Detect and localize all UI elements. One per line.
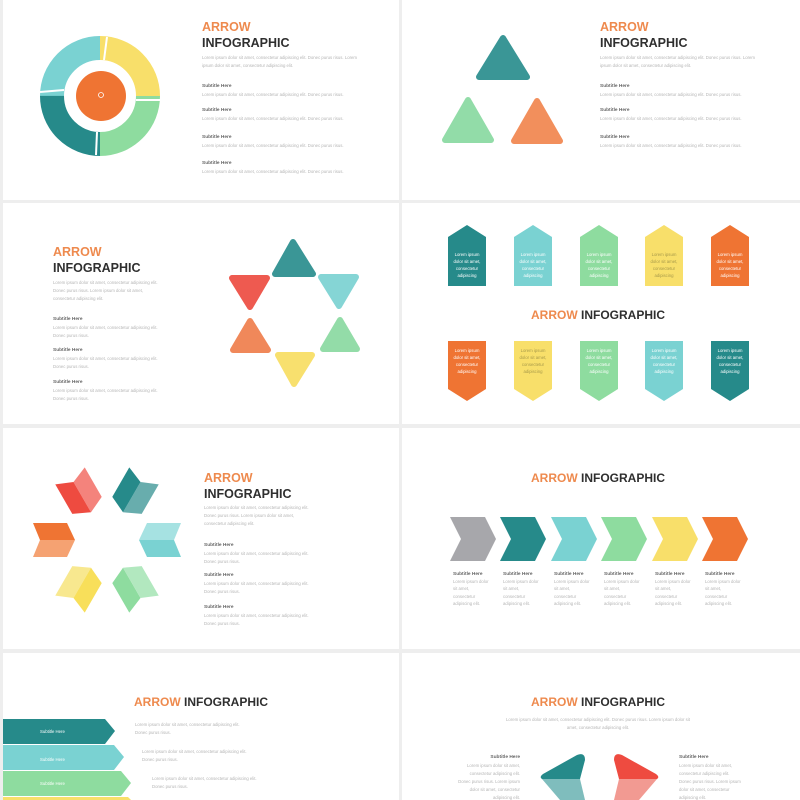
step captions: consectetur [655,594,678,599]
text block: ARROW [204,471,253,485]
step captions: Lorem ipsum dolor [503,579,539,584]
text block: Lorem ipsum dolor sit amet, consectetur adipiscing elit. Donec purus risus. [600,143,742,148]
text block: Lorem ipsum dolor sit amet, consectetur adipiscing elit. Donec purus risus. [600,92,742,97]
text block: Donec purus risus. Lorem ipsum dolor sit amet, [204,513,294,518]
top tags: adipiscing [457,273,477,278]
arrows [541,754,658,800]
left text: Donec purus risus. Lorem ipsum [458,779,520,784]
text block: Lorem ipsum dolor sit amet, consectetur adipiscing elit. [53,280,158,285]
top tags: adipiscing [523,273,543,278]
text block: INFOGRAPHIC [53,261,140,275]
bars: Subtitle Here [40,781,65,786]
title: ARROW INFOGRAPHIC [134,695,268,709]
panel: slide 3 six triangles [3,203,399,424]
bottom tags: dolor sit amet, [650,355,678,360]
text block [202,20,357,174]
step captions: sit amet, [655,586,671,591]
right text: adipiscing elit. [679,795,706,800]
text block: Lorem ipsum dolor sit amet, consectetur adipiscing elit. Donec purus risus. [202,116,344,121]
text block: Lorem ipsum dolor sit amet, consectetur adipiscing elit. [204,505,309,510]
bottom tags: Lorem ipsum [587,348,612,353]
bar text: Donec purus risus. [135,730,171,735]
step captions: consectetur [705,594,728,599]
text block: Donec purus risus. Lorem ipsum dolor sit amet, [53,288,143,293]
panel: slide 4 ten tags [402,203,800,424]
bar text: Donec purus risus. [152,784,188,789]
step captions: sit amet, [554,586,570,591]
step captions: Lorem ipsum dolor [655,579,691,584]
triangle ring [232,242,357,384]
step captions: adipiscing elit. [655,601,682,606]
text block [53,245,158,401]
step captions: Subtitle Here [503,571,533,577]
step captions: Subtitle Here [604,571,634,577]
bar text: Lorem ipsum dolor sit amet, consectetur adipiscing elit. [135,722,240,727]
step captions [453,571,741,606]
top tags: consectetur [588,266,611,271]
text block: ARROW [53,245,102,259]
step captions: Lorem ipsum dolor [554,579,590,584]
text block: Lorem ipsum dolor sit amet, consectetur adipiscing elit. [53,388,158,393]
bottom tags: consectetur [456,362,479,367]
panel: slide 5 folded arrows [3,428,399,649]
intro text: amet, consectetur adipiscing elit. [567,725,629,730]
title: ARROW INFOGRAPHIC [531,695,665,709]
text block: Subtitle Here [204,542,234,548]
chevrons [450,517,748,561]
title: ARROW INFOGRAPHIC [531,308,665,322]
bottom tags: dolor sit amet, [520,355,546,360]
top tags: consectetur [719,266,742,271]
text block: Subtitle Here [600,107,630,113]
top tags: dolor sit amet, [650,259,678,264]
bottom tags: adipiscing [589,369,609,374]
right text: Donec purus risus. Lorem ipsum [679,779,741,784]
top tags: Lorem ipsum [652,252,677,257]
top tags: dolor sit amet, [520,259,546,264]
text block: Lorem ipsum dolor sit amet, consectetur adipiscing elit. Donec purus risus. [600,116,742,121]
folded arrow ring [33,467,181,613]
text block: Lorem ipsum dolor sit amet, consectetur adipiscing elit. [204,581,309,586]
text block: Donec purus risus. [204,621,240,626]
bottom tags: Lorem ipsum [521,348,546,353]
step captions: sit amet, [453,586,469,591]
bottom tags: consectetur [719,362,742,367]
bar text: Lorem ipsum dolor sit amet, consectetur adipiscing elit. [142,749,247,754]
bottom tags: adipiscing [720,369,740,374]
top tags [448,225,749,286]
text block: Lorem ipsum dolor sit amet, consectetur adipiscing elit. [204,551,309,556]
step captions: Lorem ipsum dolor [453,579,489,584]
text block: Subtitle Here [202,134,232,140]
text block: Subtitle Here [204,572,234,578]
top tags: Lorem ipsum [587,252,612,257]
text block: ipsum dolor sit amet, consectetur adipiscing elit. [202,63,293,68]
ring chart [40,37,160,155]
step captions: adipiscing elit. [503,601,530,606]
step captions: consectetur [503,594,526,599]
top tags: Lorem ipsum [455,252,480,257]
top tags: consectetur [456,266,479,271]
bottom tags: consectetur [522,362,545,367]
triangle teal [479,38,527,77]
text block: Subtitle Here [600,134,630,140]
left text: adipiscing elit. [493,795,520,800]
bar text [135,722,257,789]
bar text: Lorem ipsum dolor sit amet, consectetur adipiscing elit. [152,776,257,781]
step captions: Lorem ipsum dolor [705,579,741,584]
bottom tags: adipiscing [457,369,477,374]
step captions: Subtitle Here [554,571,584,577]
text block: INFOGRAPHIC [600,36,688,50]
step captions: Subtitle Here [453,571,483,577]
text block: INFOGRAPHIC [202,36,290,50]
step captions: Subtitle Here [705,571,735,577]
top tags: consectetur [653,266,676,271]
left text: consectetur adipiscing elit. [470,771,520,776]
text block: Lorem ipsum dolor sit amet, consectetur adipiscing elit. Donec purus risus. [202,169,344,174]
top tags: consectetur [522,266,545,271]
text block: Subtitle Here [600,83,630,89]
bars: Subtitle Here [40,729,65,734]
text block: Subtitle Here [202,107,232,113]
right text: dolor sit amet, consectetur [679,787,730,792]
bottom tags: consectetur [653,362,676,367]
text block: Subtitle Here [53,316,83,322]
text block: Subtitle Here [202,83,232,89]
bottom tags: dolor sit amet, [454,355,480,360]
bars [3,719,131,800]
panel: slide 1 circular arrows [3,0,399,200]
text block: Donec purus risus. [53,396,89,401]
triangle orange [514,101,560,141]
bars: Subtitle Here [40,757,65,762]
left text: Lorem ipsum dolor sit amet, [467,763,520,768]
bar text: Donec purus risus. [142,757,178,762]
panel: slide 6 chevron process [402,428,800,649]
text block: Lorem ipsum dolor sit amet, consectetur adipiscing elit. [204,613,309,618]
bottom tags: Lorem ipsum [455,348,480,353]
text block: consectetur adipiscing elit. [204,521,254,526]
top tags: dolor sit amet, [586,259,612,264]
intro text [506,717,691,730]
step captions: Subtitle Here [655,571,685,577]
center circle [76,71,126,121]
step captions: consectetur [554,594,577,599]
text block: consectetur adipiscing elit. [53,296,103,301]
text block: INFOGRAPHIC [204,487,292,501]
step captions: adipiscing elit. [705,601,732,606]
panel: slide 8 opposing arrows [402,653,800,800]
bottom tags [448,341,749,401]
text block: Lorem ipsum dolor sit amet, consectetur adipiscing elit. [53,356,158,361]
step captions: adipiscing elit. [604,601,631,606]
text block: Lorem ipsum dolor sit amet, consectetur adipiscing elit. Donec purus risus. [202,92,344,97]
text block: Subtitle Here [204,604,234,610]
bottom tags: dolor sit amet, [586,355,612,360]
left text: Subtitle Here [490,754,520,760]
step captions: consectetur [604,594,627,599]
text block: ipsum dolor sit amet, consectetur adipiscing elit. [600,63,691,68]
text block [204,471,309,626]
step captions: sit amet, [503,586,519,591]
bottom tags: consectetur [588,362,611,367]
right text: consectetur adipiscing elit. [679,771,729,776]
step captions: sit amet, [604,586,620,591]
top tags: adipiscing [589,273,609,278]
intro text: Lorem ipsum dolor sit amet, consectetur adipiscing elit. Donec purus risus. Lorem ipsum dolor sit [506,717,691,722]
step captions: adipiscing elit. [453,601,480,606]
text block: ARROW [600,20,649,34]
text block [600,20,755,148]
bottom tags: dolor sit amet, [716,355,744,360]
bottom tags: adipiscing [523,369,543,374]
step captions: Lorem ipsum dolor [604,579,640,584]
text block: ARROW [202,20,251,34]
top tags: adipiscing [720,273,740,278]
text block: Lorem ipsum dolor sit amet, consectetur adipiscing elit. [53,325,158,330]
right text: Subtitle Here [679,754,709,760]
right text: Lorem ipsum dolor sit amet, [679,763,732,768]
text block: Lorem ipsum dolor sit amet, consectetur adipiscing elit. Donec purus risus. Lorem [202,55,357,60]
top tags: Lorem ipsum [521,252,546,257]
top tags: dolor sit amet, [454,259,480,264]
bottom tags: Lorem ipsum [652,348,677,353]
step captions: consectetur [453,594,476,599]
right text [679,754,741,800]
text block: Subtitle Here [202,160,232,166]
step captions: adipiscing elit. [554,601,581,606]
bottom tags: Lorem ipsum [718,348,743,353]
panel: slide 7 stacked bars [3,653,399,800]
left text [458,754,521,800]
text block: Donec purus risus. [53,364,89,369]
text block: Donec purus risus. [53,333,89,338]
triangle green [445,100,491,140]
title: ARROW INFOGRAPHIC [531,471,665,485]
text block: Subtitle Here [53,347,83,353]
text block: Lorem ipsum dolor sit amet, consectetur adipiscing elit. Donec purus risus. [202,143,344,148]
text block: Donec purus risus. [204,589,240,594]
top tags: dolor sit amet, [716,259,744,264]
text block: Subtitle Here [53,379,83,385]
top tags: adipiscing [654,273,674,278]
text block: Donec purus risus. [204,559,240,564]
step captions: sit amet, [705,586,721,591]
panel: slide 2 three triangles [402,0,800,200]
bottom tags: adipiscing [654,369,674,374]
left text: dolor sit amet, consectetur [470,787,521,792]
text block: Lorem ipsum dolor sit amet, consectetur adipiscing elit. Donec purus risus. Lorem [600,55,755,60]
top tags: Lorem ipsum [718,252,743,257]
